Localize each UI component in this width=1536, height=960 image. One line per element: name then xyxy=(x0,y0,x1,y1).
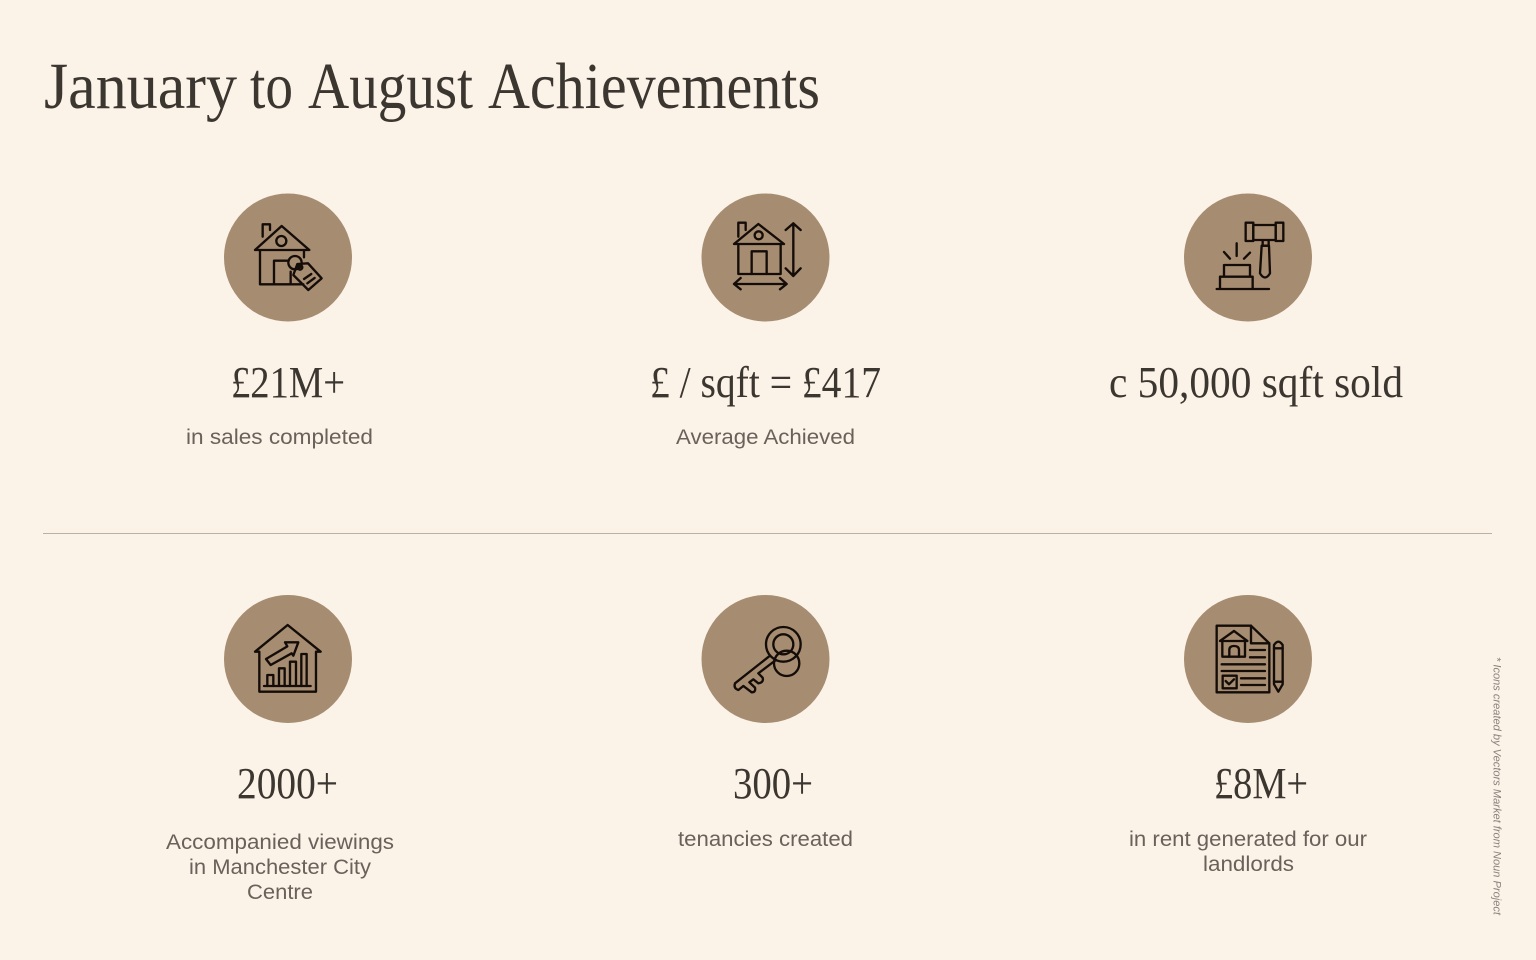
label: Average Achieved xyxy=(676,425,855,449)
title: to xyxy=(250,50,293,123)
label: tenancies created xyxy=(678,827,853,851)
title xyxy=(44,50,820,123)
icon: house with rising bar chart xyxy=(224,595,352,723)
label: landlords xyxy=(1203,852,1294,876)
value: 300+ xyxy=(733,759,813,808)
panel: rent generated xyxy=(1129,595,1367,876)
panel: accompanied viewings xyxy=(166,595,394,904)
footnote: icon credit: * Icons created by Vectors Market from Noun Project xyxy=(1490,657,1502,916)
label xyxy=(166,830,394,904)
panel: tenancies created xyxy=(678,595,853,851)
icon: property document and pencil xyxy=(1184,595,1312,723)
title: Achievements xyxy=(488,50,820,123)
icon: key with ring xyxy=(702,595,830,723)
label xyxy=(1129,827,1367,876)
icon: house with price tag xyxy=(224,194,352,322)
value: £8M+ xyxy=(1214,759,1308,808)
icon: auction gavel xyxy=(1184,194,1312,322)
panel: sales completed xyxy=(186,194,373,449)
title: August xyxy=(308,50,473,123)
panel: average price per square foot xyxy=(650,194,881,449)
label: in Manchester City xyxy=(189,855,371,879)
label: in sales completed xyxy=(186,425,373,449)
value: c 50,000 sqft sold xyxy=(1109,358,1403,407)
value: 2000+ xyxy=(237,759,338,808)
value: £ / sqft = £417 xyxy=(650,358,881,407)
label: Accompanied viewings xyxy=(166,830,394,854)
value: £21M+ xyxy=(231,358,345,407)
icon: house with dimension arrows xyxy=(702,194,830,322)
label: Centre xyxy=(247,880,313,904)
panel: square feet sold xyxy=(1109,194,1403,407)
label: in rent generated for our xyxy=(1129,827,1367,851)
title: January xyxy=(44,50,237,123)
